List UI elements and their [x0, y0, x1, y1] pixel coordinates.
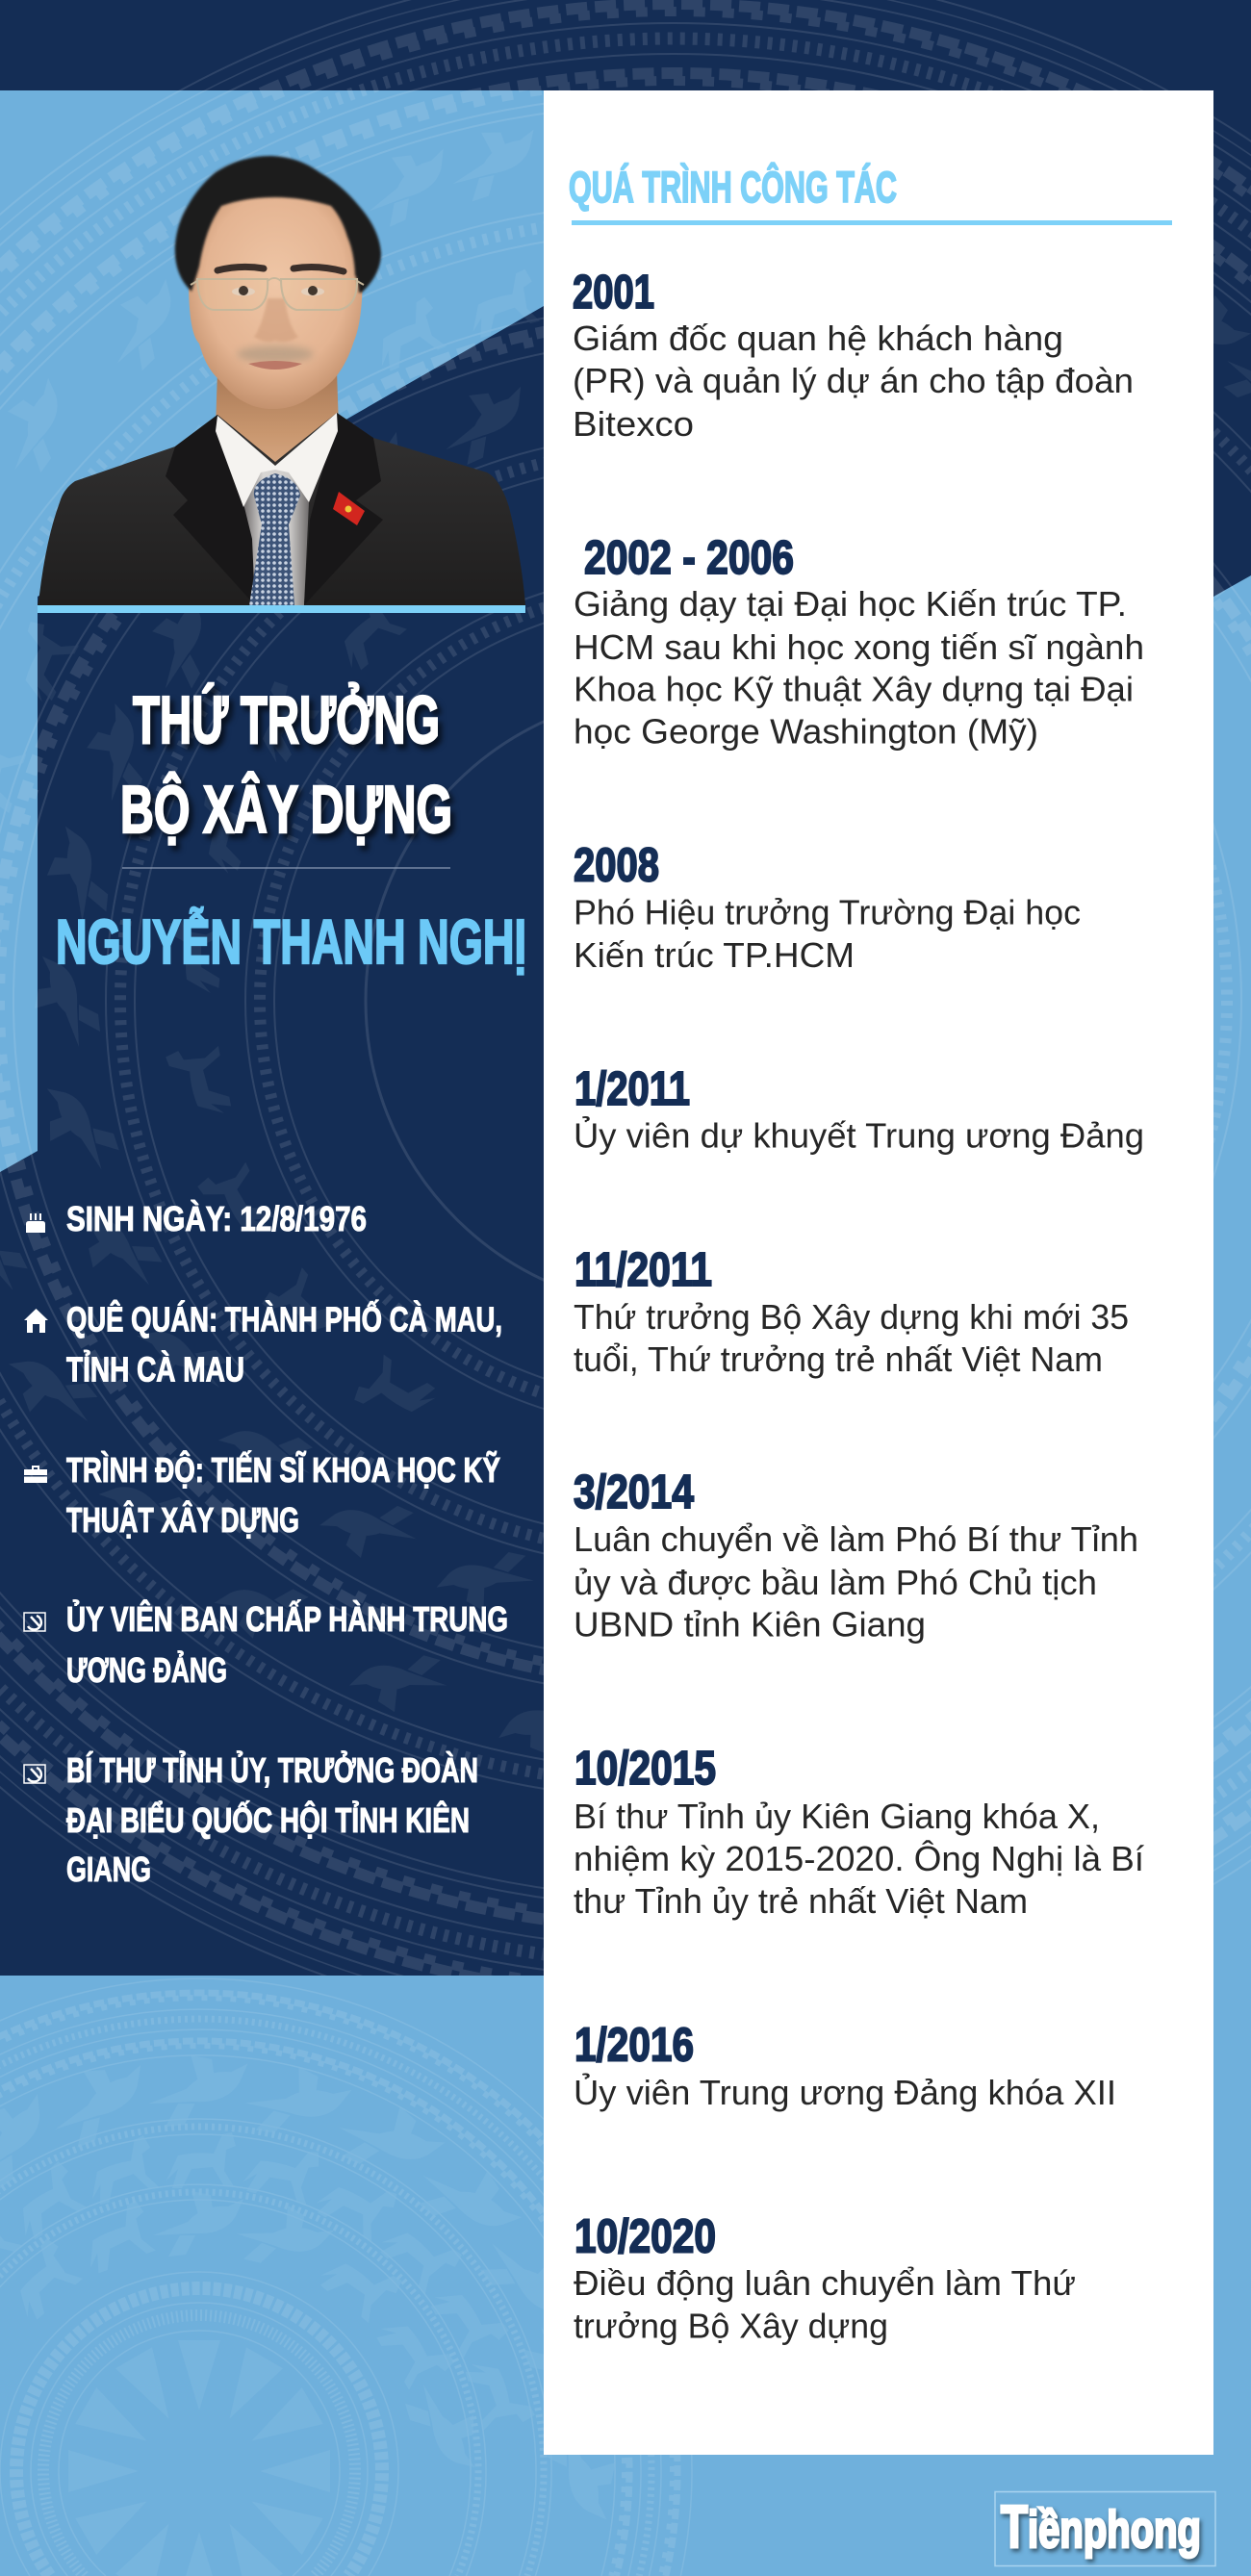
timeline: 1/2011: 1/2011	[574, 1063, 690, 1115]
timeline: 2001	[573, 267, 1134, 444]
timeline: 10/2020	[574, 2211, 1076, 2346]
info: provincial secretary: GIANG	[66, 1849, 151, 1889]
timeline: 10/2015	[574, 1743, 1144, 1921]
nose	[254, 298, 298, 342]
timeline: 1/2011	[574, 1063, 1144, 1155]
timeline: 1/2016: 1/2016	[574, 2019, 694, 2071]
timeline: 2001: (PR) và quản lý dự án cho tập đoàn	[573, 361, 1134, 400]
bronze drum pattern: lower drum	[0, 1978, 692, 2576]
timeline: 2008: 2008	[574, 839, 659, 891]
suit jacket	[38, 413, 525, 605]
photo base bar	[38, 605, 525, 613]
heading underline	[572, 220, 1172, 225]
info: hometown: TỈNH CÀ MAU	[66, 1349, 244, 1390]
info: education: TRÌNH ĐỘ: TIẾN SĨ KHOA HỌC KỸ	[66, 1449, 500, 1490]
title: position: BỘ XÂY DỰNG	[120, 771, 452, 847]
timeline: 10/2020: Điều động luân chuyển làm Thứ	[574, 2263, 1076, 2303]
shirt front	[243, 470, 309, 605]
necktie	[249, 473, 300, 605]
info: hometown: QUÊ QUÁN: THÀNH PHỐ CÀ MAU,	[66, 1299, 502, 1339]
info: provincial secretary: BÍ THƯ TỈNH ỦY, TRƯỞNG ĐOÀN	[66, 1749, 478, 1790]
lapel flag pin	[333, 492, 365, 525]
timeline: 2001: 2001	[573, 267, 654, 319]
timeline: 3/2014: 3/2014	[574, 1467, 694, 1518]
timeline: 2002 - 2006	[574, 532, 1144, 751]
icon: party flag	[24, 1613, 45, 1631]
timeline: 11/2011: Thứ trưởng Bộ Xây dựng khi mới 35	[574, 1297, 1129, 1337]
timeline: 11/2011: tuổi, Thứ trưởng trẻ nhất Việt Nam	[574, 1339, 1103, 1379]
lapels	[166, 413, 383, 605]
portrait photo	[38, 156, 525, 605]
background: light blue strip on right	[1213, 575, 1251, 2576]
mouth	[248, 361, 302, 370]
timeline: 2001: Bitexco	[573, 404, 694, 444]
timeline: 10/2015: Bí thư Tỉnh ủy Kiên Giang khóa X,	[574, 1797, 1100, 1836]
timeline: 3/2014: UBND tỉnh Kiên Giang	[574, 1605, 926, 1644]
info: provincial secretary: ĐẠI BIỂU QUỐC HỘI TỈNH KIÊN	[66, 1799, 470, 1840]
shirt collar	[216, 413, 338, 507]
icon: house	[24, 1309, 48, 1333]
heading: career history: QUÁ TRÌNH CÔNG TÁC	[569, 163, 897, 212]
timeline: 10/2015: thư Tỉnh ủy trẻ nhất Việt Nam	[574, 1881, 1028, 1921]
timeline: 2008: Kiến trúc TP.HCM	[574, 935, 855, 975]
neck	[216, 370, 339, 476]
timeline: 10/2015: nhiệm kỳ 2015-2020. Ông Nghị là Bí	[574, 1839, 1144, 1878]
title: name: NGUYỄN THANH NGHỊ	[56, 906, 526, 977]
title: position: THỨ TRƯỞNG	[133, 681, 440, 757]
timeline: 2008	[574, 839, 1081, 975]
info: education	[24, 1449, 500, 1540]
timeline: 10/2020: trưởng Bộ Xây dựng	[574, 2306, 888, 2346]
timeline: 2002 - 2006: 2002 - 2006	[584, 532, 794, 584]
background: light blue bottom band	[0, 1976, 1251, 2576]
glasses	[191, 278, 364, 310]
panel: white career timeline	[544, 90, 1213, 2455]
info: date of birth: SINH NGÀY: 12/8/1976	[66, 1199, 367, 1238]
hair	[175, 156, 381, 293]
face	[189, 191, 363, 409]
icon: briefcase	[24, 1466, 47, 1483]
info: central committee	[24, 1598, 508, 1690]
timeline: 2002 - 2006: Giảng dạy tại Đại học Kiến trúc TP.	[574, 584, 1127, 624]
eyebrows	[217, 267, 344, 271]
info: central committee: ƯƠNG ĐẢNG	[66, 1650, 227, 1690]
chin and moustache shading	[237, 345, 314, 363]
timeline: 10/2020: 10/2020	[574, 2211, 716, 2263]
icon: party flag	[24, 1765, 45, 1783]
info: hometown	[24, 1299, 502, 1390]
timeline: 3/2014	[574, 1467, 1138, 1644]
timeline: 1/2016: Ủy viên Trung ương Đảng khóa XII	[574, 2072, 1116, 2112]
timeline: 1/2016	[574, 2019, 1116, 2112]
info: provincial secretary	[24, 1749, 478, 1889]
info: education: THUẬT XÂY DỰNG	[66, 1499, 299, 1540]
icon: cake	[26, 1213, 45, 1233]
title: position	[120, 681, 452, 847]
bronze drum pattern: large upper drum	[0, 0, 1251, 2036]
timeline: 1/2011: Ủy viên dự khuyết Trung ương Đảng	[574, 1114, 1144, 1155]
timeline: 2002 - 2006: học George Washington (Mỹ)	[574, 712, 1038, 751]
timeline: 2008: Phó Hiệu trưởng Trường Đại học	[574, 893, 1081, 931]
timeline: 2002 - 2006: HCM sau khi học xong tiến sĩ ngành	[574, 627, 1144, 667]
timeline: 10/2015: 10/2015	[574, 1743, 716, 1795]
timeline: 2002 - 2006: Khoa học Kỹ thuật Xây dựng tại Đại	[574, 670, 1134, 708]
timeline: 11/2011	[574, 1244, 1129, 1379]
timeline: 2001: Giám đốc quan hệ khách hàng	[573, 319, 1063, 358]
background: dark navy base	[0, 0, 1251, 1976]
info: central committee: ỦY VIÊN BAN CHẤP HÀNH TRUNG	[66, 1598, 508, 1639]
eyes	[232, 286, 324, 296]
timeline: 11/2011: 11/2011	[574, 1244, 712, 1296]
timeline: 3/2014: ủy và được bầu làm Phó Chủ tịch	[574, 1563, 1097, 1602]
timeline: 3/2014: Luân chuyển về làm Phó Bí thư Tỉnh	[574, 1519, 1138, 1559]
background: light blue diagonal panel top left	[0, 90, 544, 1172]
